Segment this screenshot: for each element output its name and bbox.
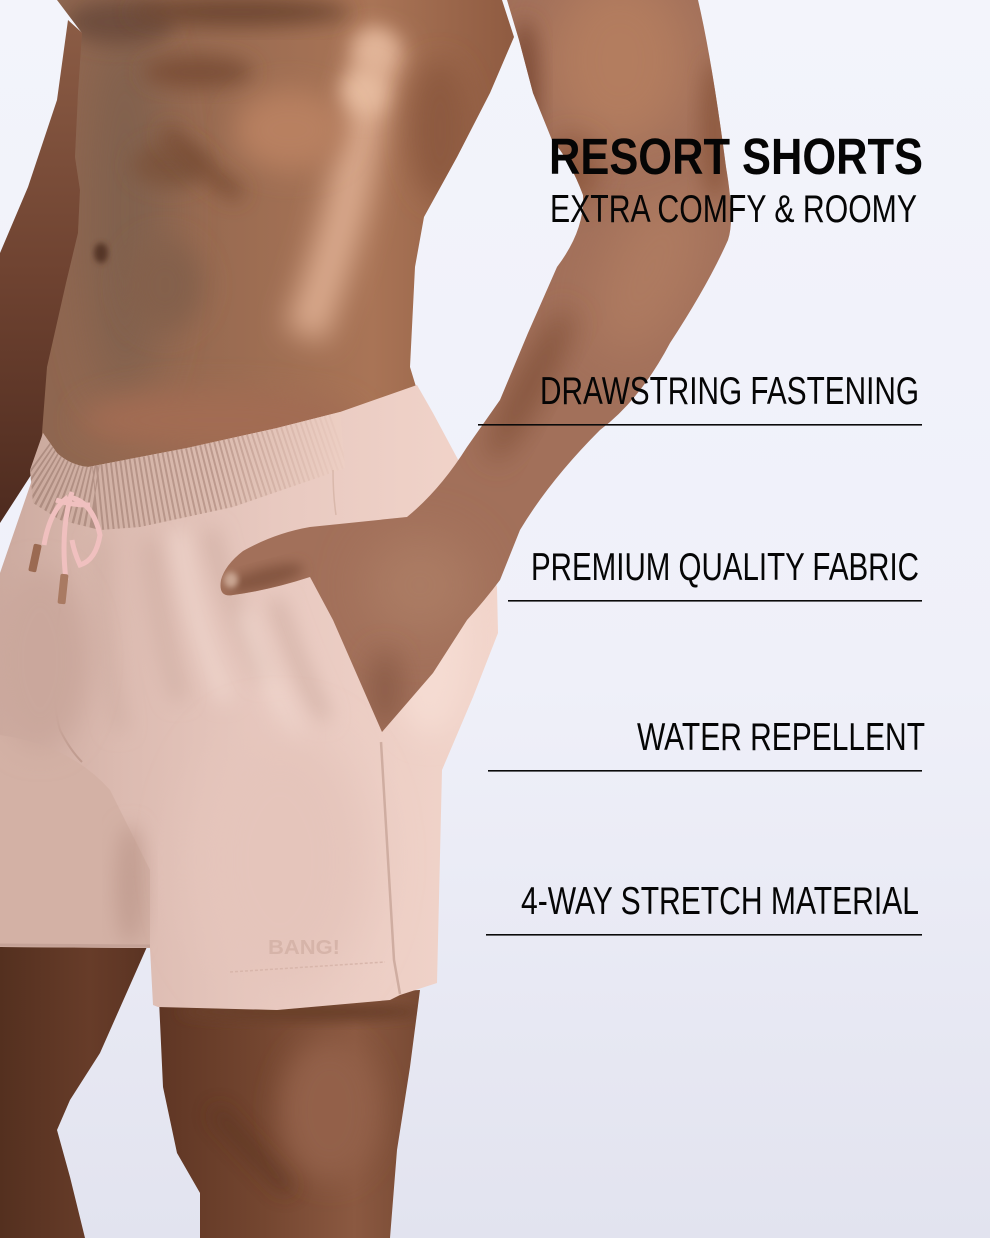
right leg [150, 990, 430, 1238]
logo mark: BANG! [268, 937, 340, 959]
hem stitching [230, 962, 385, 972]
drawstring [28, 492, 100, 604]
right arm and hand [200, 0, 740, 740]
back of hand [384, 552, 456, 618]
chest hair shading [85, 20, 165, 400]
fabric folds [156, 538, 330, 718]
fly seam [60, 732, 82, 762]
left leg [0, 940, 150, 1238]
title: RESORT SHORTS [549, 128, 923, 185]
side seam [381, 742, 400, 994]
fingernail [224, 572, 238, 588]
torso [30, 0, 530, 490]
swim shorts [0, 380, 500, 1020]
back leg panel [5, 778, 150, 948]
highlights [305, 40, 385, 335]
photo: model figure [0, 0, 740, 1238]
waistband [30, 412, 340, 530]
left arm [0, 20, 90, 523]
